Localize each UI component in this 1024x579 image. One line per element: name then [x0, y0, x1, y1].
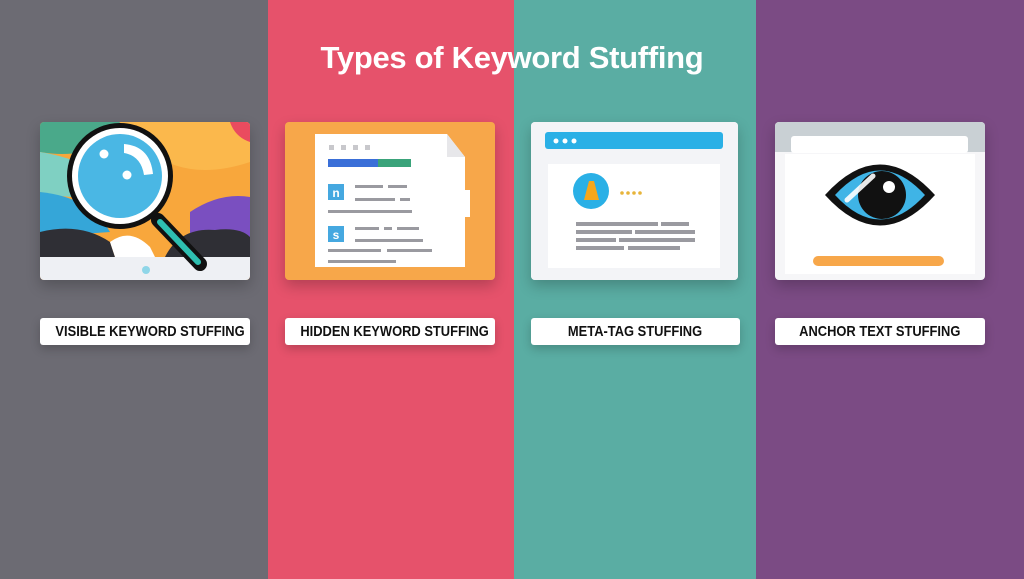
- card: meta-tag stuffing (browser): [531, 122, 738, 280]
- label: visible keyword stuffing: VISIBLE KEYWORD STUFFING: [55, 323, 245, 340]
- card: hidden keyword stuffing (document): s: [333, 228, 340, 242]
- label: visible keyword stuffing: [40, 318, 250, 345]
- label: hidden keyword stuffing: HIDDEN KEYWORD STUFFING: [300, 323, 489, 340]
- card: hidden keyword stuffing (document): [285, 122, 495, 280]
- card: hidden keyword stuffing (document): n: [332, 186, 340, 200]
- title: Types of Keyword Stuffing: [321, 40, 703, 75]
- card: visible keyword stuffing (magnifier): [40, 122, 250, 280]
- card: anchor text stuffing (eye): [775, 122, 985, 280]
- label: anchor text stuffing: [775, 318, 985, 345]
- label: hidden keyword stuffing: [285, 318, 495, 345]
- label: anchor text stuffing: ANCHOR TEXT STUFFING: [799, 323, 961, 340]
- label: meta-tag stuffing: [531, 318, 740, 345]
- label: meta-tag stuffing: META-TAG STUFFING: [568, 323, 703, 340]
